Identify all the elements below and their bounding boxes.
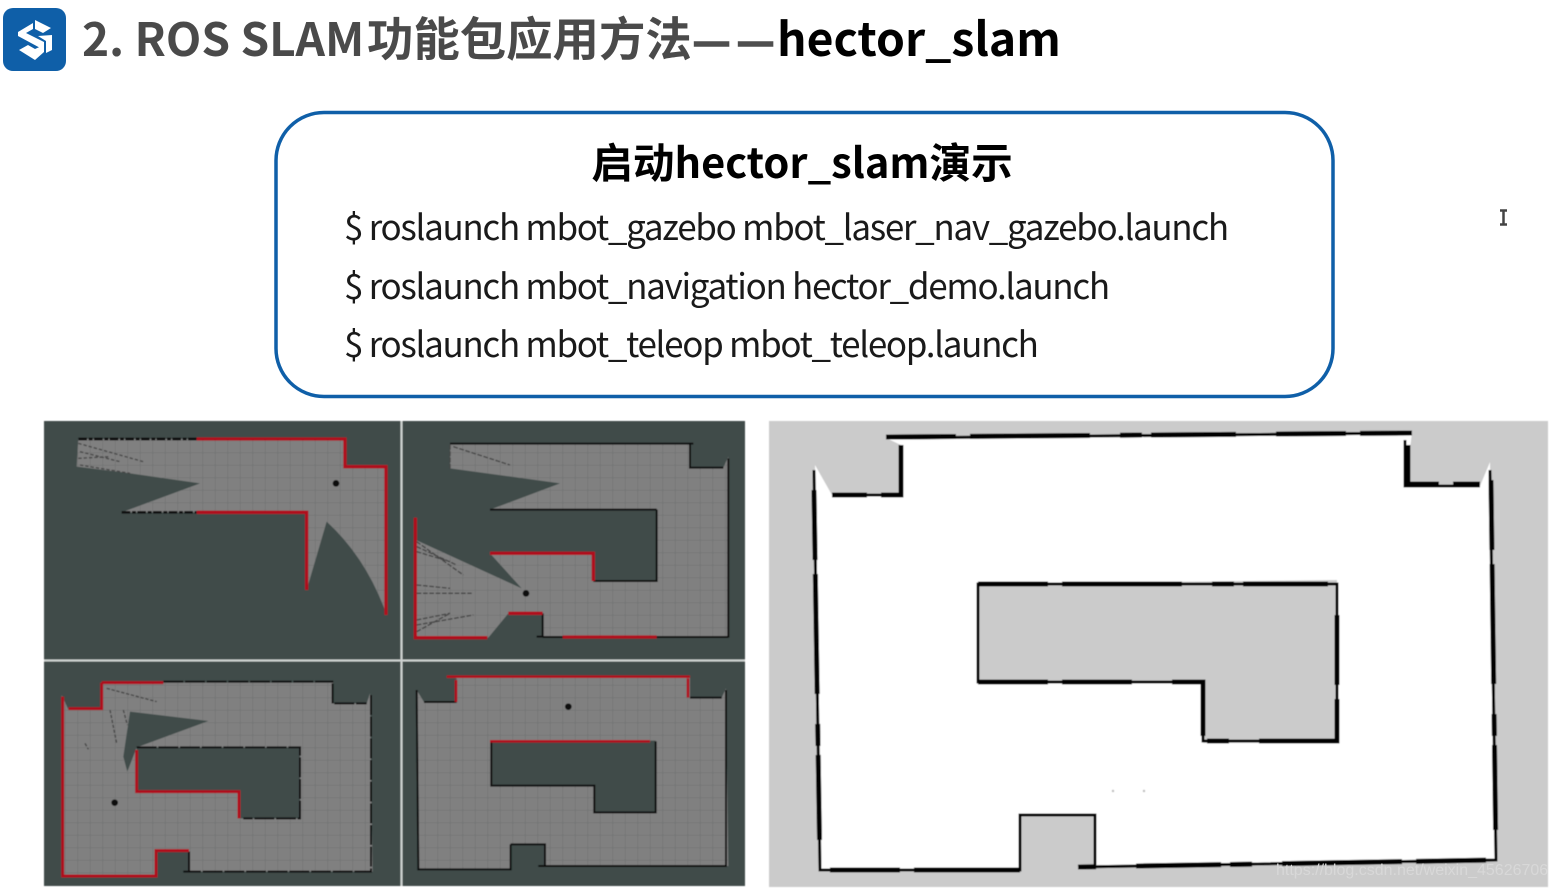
map frame: bottom left: [62, 682, 373, 876]
command lines: [344, 200, 1228, 368]
command lines: $ roslaunch mbot_teleop mbot_teleop.launch: [344, 317, 1038, 368]
command lines: $ roslaunch mbot_gazebo mbot_laser_nav_gazebo.launch: [344, 200, 1228, 251]
map frame: top right: [415, 444, 728, 638]
rviz map mosaic: [44, 421, 745, 886]
map frame: bottom right: [417, 677, 728, 869]
title: 功能包应用方法: [367, 3, 692, 70]
text cursor icon: [1500, 210, 1507, 224]
mosaic dividers: [44, 421, 745, 886]
watermark: https://blog.csdn.net/weixin_45626706: [1276, 862, 1548, 879]
occupancy grid map: [769, 421, 1548, 887]
logo icon: [3, 8, 66, 71]
command panel: [276, 112, 1333, 396]
command lines: $ roslaunch mbot_navigation hector_demo.launch: [344, 259, 1109, 310]
title: hector_slam: [777, 3, 1061, 70]
title: —: [692, 8, 731, 69]
map frame: top left: [77, 439, 387, 615]
title: [82, 3, 1061, 70]
title: —: [736, 8, 775, 69]
title: 2. ROS SLAM: [82, 4, 364, 70]
panel heading: 启动hector_slam演示: [591, 130, 1013, 190]
